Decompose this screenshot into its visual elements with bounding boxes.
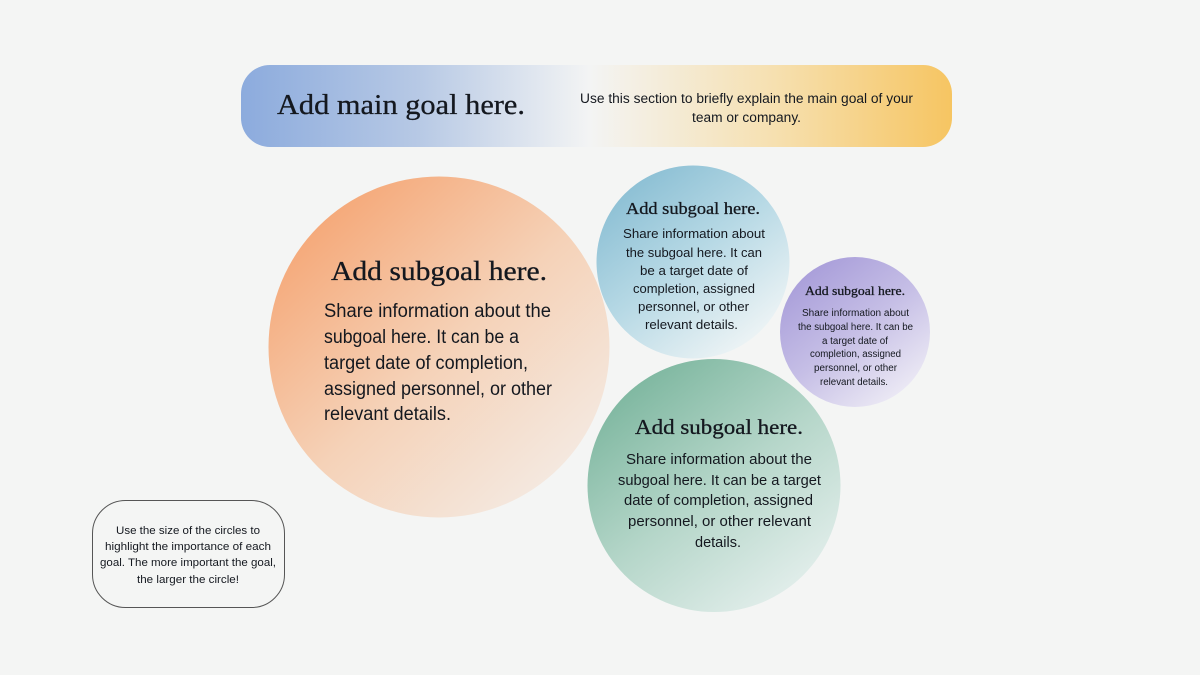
text: green subgoal details [618,452,821,551]
text: green subgoal details: Share information about the [626,452,812,468]
text: purple subgoal details: completion, assigned [810,349,901,360]
text: orange subgoal details: relevant details. [324,404,451,425]
text: blue subgoal details: be a target date of [640,263,748,278]
panel: green subgoal circle [588,359,840,612]
text: purple subgoal details: a target date of [822,336,888,347]
text: orange subgoal details [324,301,553,425]
panel: main goal [241,65,952,147]
text: green subgoal details: personnel, or other relevant [628,514,811,530]
text: purple subgoal details: personnel, or other [814,363,898,374]
heading: purple subgoal: Add subgoal here. [805,283,905,298]
text: purple subgoal details: the subgoal here. It can be [798,322,913,333]
text: blue subgoal details: Share information about [623,226,765,241]
text: blue subgoal details: personnel, or other [638,299,750,314]
panel: blue subgoal circle [596,166,790,358]
text: blue subgoal details: completion, assigned [633,281,755,296]
text: main goal description: Use this section to briefly explain the main goal of your [580,91,914,106]
text: orange subgoal details: assigned personnel, or other [324,379,553,400]
text: purple subgoal details: relevant details. [820,377,888,388]
heading: green subgoal: Add subgoal here. [635,415,803,439]
text: main goal description: team or company. [692,110,801,125]
text: green subgoal details: details. [695,535,741,551]
heading: orange subgoal: Add subgoal here. [331,256,547,286]
text: blue subgoal details [623,226,765,332]
callout: circle size note [92,500,284,608]
heading: main goal: Add main goal here. [277,89,525,121]
panel: purple subgoal circle [780,257,930,407]
text: blue subgoal details: the subgoal here. It can [626,245,762,260]
text: orange subgoal details: target date of completion, [324,353,528,374]
text: purple subgoal details: Share information about [802,308,909,319]
text: main goal description [580,91,914,125]
text: blue subgoal details: relevant details. [645,317,738,332]
callout: circle size note: Use the size of the circles to [116,525,260,537]
callout: circle size note: highlight the importance of each [105,541,271,553]
panel: large orange subgoal circle [268,176,610,518]
callout: circle size note: goal. The more important the goal, [100,557,276,569]
text: green subgoal details: subgoal here. It can be a target [618,473,821,489]
text: green subgoal details: date of completion, assigned [624,493,813,509]
text: orange subgoal details: subgoal here. It can be a [324,327,519,348]
text: orange subgoal details: Share information about the [324,301,551,322]
callout: circle size note: the larger the circle! [137,574,239,586]
text: purple subgoal details [798,308,913,388]
heading: blue subgoal: Add subgoal here. [626,199,760,218]
